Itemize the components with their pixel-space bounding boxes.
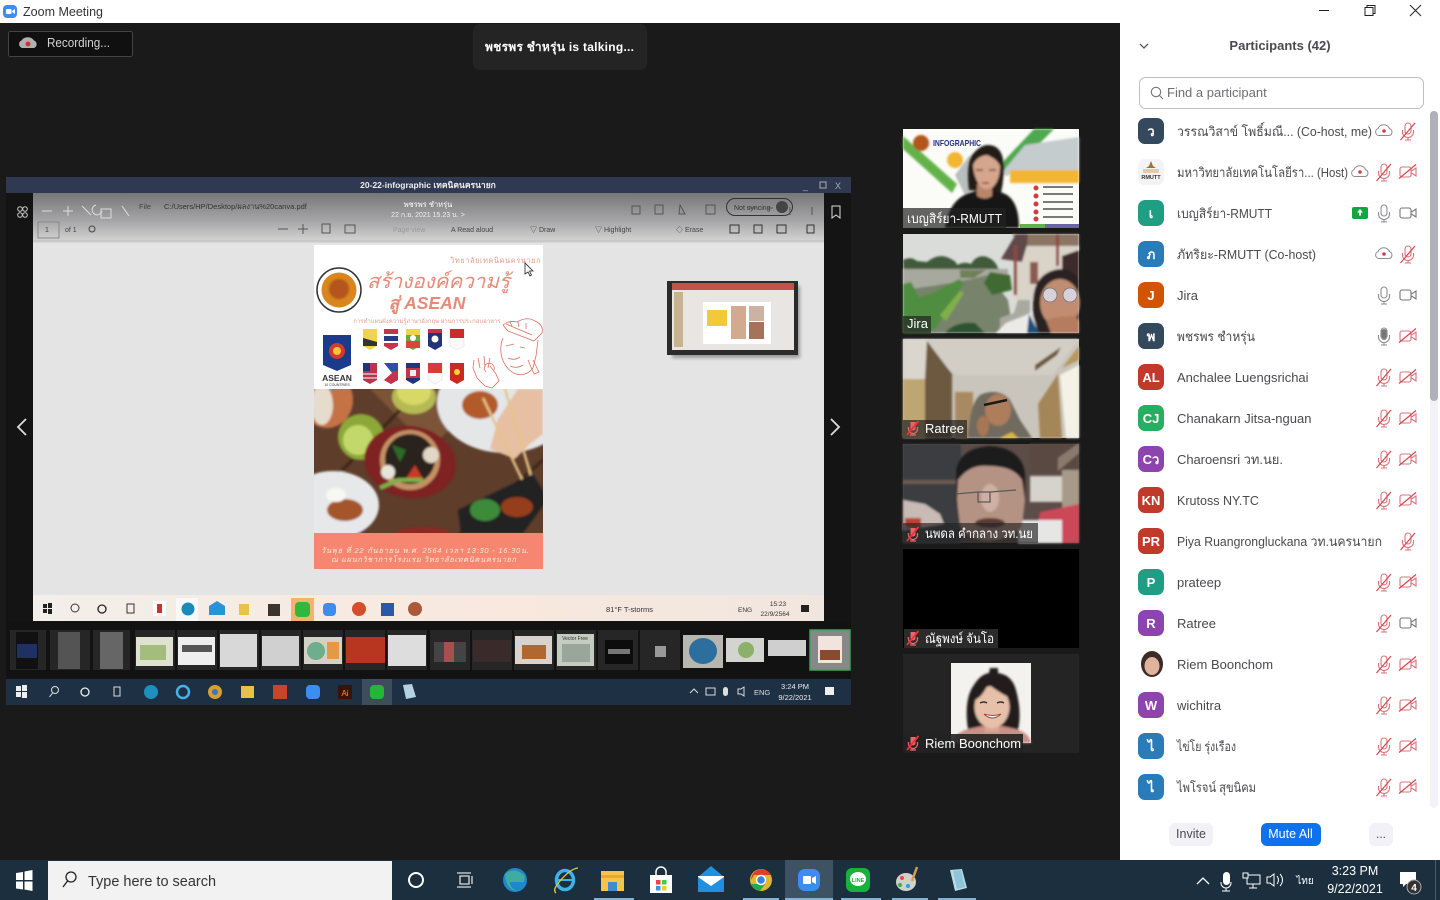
poster title: วิทยาลัยเทคนิคนครนายก	[449, 256, 541, 265]
participant: Riem Boonchom: Riem Boonchom	[1177, 657, 1273, 672]
shared screen window	[6, 177, 851, 705]
shared window title bar: 20-22-infographic เทคนิคนครนายก	[360, 180, 496, 190]
participant: ภัทริยะ-RMUTT: ภัทริยะ-RMUTT (Co-host)	[1177, 247, 1316, 262]
viewer toolbar: 22 ก.ย. 2021 15.23 น. >	[391, 212, 465, 219]
participant: Anchalee Luengsrichai	[1138, 364, 1416, 390]
icon: line	[841, 868, 881, 900]
icon: mail	[698, 866, 724, 892]
viewer toolbar: ▽ Draw	[530, 226, 556, 234]
cursor	[525, 263, 533, 276]
date banner	[314, 533, 543, 569]
ASEAN pennant	[322, 335, 352, 387]
date banner: วันพุธ ที่ 22 กันยายน พ.ศ. 2564 เวลา 13:30 - 16:30น.	[321, 545, 529, 555]
video tile: Jira: Jira	[907, 316, 929, 331]
system tray: ไทย	[1295, 875, 1314, 887]
participant: Anchalee Luengsrichai: Anchalee Luengsrichai	[1177, 370, 1309, 385]
mini taskbar	[33, 595, 824, 621]
viewer toolbar: C:/Users/HP/Desktop/ผลงาน%20canva.pdf	[164, 202, 308, 211]
talking indicator: พชรพร ชำหรุ่น is talking...	[485, 40, 634, 55]
participants heading: Participants (42)	[1229, 38, 1331, 53]
video tile: Ratree	[903, 339, 1079, 438]
poster title: สร้างองค์ความรู้	[367, 270, 514, 294]
participant: เบญสิร์ยา-RMUTT: เบญสิร์ยา-RMUTT	[1177, 206, 1272, 221]
participant: ไพโรจน์ สุขนิคม: ไ	[1146, 779, 1155, 795]
inset presenter preview	[667, 281, 800, 358]
participant: Ratree	[1138, 610, 1416, 636]
participant: Piya Ruangrongluckana	[1138, 528, 1415, 554]
icon: internet explorer	[555, 868, 578, 893]
presenter's taskbar: 3:24 PM	[781, 682, 809, 691]
video tile: Riem Boonchom	[903, 654, 1079, 753]
title bar	[0, 0, 1120, 23]
presenter's thumbnail strip	[6, 622, 851, 678]
participant: prateep	[1138, 569, 1416, 595]
participant: พชรพร ชำหรุ่น: พ	[1147, 329, 1155, 344]
participant: Piya Ruangrongluckana: PR	[1142, 534, 1161, 549]
icon: line: LINE	[852, 878, 865, 884]
search box	[1140, 78, 1424, 108]
date banner: ณ แผนกวิชาการโรงแรม วิทยาลัยเทคนิคนครนายก	[331, 555, 516, 564]
mini taskbar: 22/9/2564	[761, 611, 790, 618]
icon: file explorer	[594, 871, 634, 900]
clock: 3:23 PM	[1332, 864, 1378, 878]
video tile: นพดล คำกลาง วท.นย: นพดล คำกลาง วท.นย	[925, 526, 1033, 541]
participant: Host: มหาวิทยาลัยเทคโนโลยีรา... (Host)	[1177, 165, 1348, 180]
video tile: เบญสิร์ยา-RMUTT	[903, 129, 1079, 228]
collapse chevron	[1140, 44, 1148, 48]
participant: wichitra	[1138, 692, 1416, 718]
participant: Krutoss NY.TC	[1138, 487, 1416, 513]
participant: ไพโรจน์ สุขนิคม	[1138, 774, 1416, 800]
viewer toolbar	[18, 193, 840, 243]
poster title	[353, 256, 541, 325]
participant: Jira: Jira	[1177, 288, 1199, 303]
icon: cortana	[409, 873, 423, 887]
search box	[48, 861, 392, 900]
icon: start	[16, 870, 32, 891]
poster title: การทำแผนผังความรู้ภาษาอังกฤษ ผ่านการประกอบอาหาร	[353, 318, 502, 325]
college seal	[317, 268, 361, 312]
participant: Jira	[1138, 282, 1416, 308]
participant: พชรพร ชำหรุ่น	[1138, 323, 1416, 349]
notification badge: 4	[1411, 883, 1417, 894]
participant: ไข่โย รุ่งเรือง	[1138, 733, 1416, 759]
mute all button: Mute All	[1268, 827, 1313, 841]
participant: ภัทริยะ-RMUTT: ภ	[1147, 247, 1155, 262]
participant: Piya Ruangrongluckana: Piya Ruangrongluckana วท.นครนายก	[1177, 534, 1382, 549]
participant: ภัทริยะ-RMUTT	[1138, 241, 1415, 267]
participant: wichitra: wichitra	[1176, 698, 1222, 713]
viewer toolbar: 1	[45, 227, 49, 234]
participant: Chanakarn Jitsa-nguan: CJ	[1143, 411, 1159, 426]
video tile: เบญสิร์ยา-RMUTT: INFOGRAPHIC	[933, 138, 981, 148]
participant: wichitra: W	[1145, 698, 1158, 713]
presenter's taskbar: ENG	[754, 688, 770, 697]
chef drawing	[473, 319, 542, 388]
invite button	[1169, 823, 1213, 846]
participant: prateep: P	[1147, 575, 1156, 590]
mini taskbar: 81°F T-storms	[606, 605, 653, 614]
PDF viewer	[18, 193, 840, 621]
mini taskbar: ENG	[738, 607, 752, 614]
participant: เบญสิร์ยา-RMUTT	[1138, 200, 1416, 226]
video tile: Riem Boonchom: Riem Boonchom	[925, 736, 1021, 751]
video tile: เบญสิร์ยา-RMUTT: เบญสิร์ยา-RMUTT	[907, 211, 1002, 226]
viewer toolbar: พชรพร ชำหรุ่น	[404, 200, 452, 209]
presenter's taskbar: 9/22/2021	[778, 693, 812, 702]
participant: Anchalee Luengsrichai: AL	[1142, 370, 1160, 385]
participant: Charoensri	[1138, 446, 1416, 472]
icon: task view	[457, 873, 472, 887]
notification badge	[1400, 872, 1421, 894]
talking indicator	[473, 24, 647, 70]
clock	[1327, 864, 1383, 896]
mute all button	[1261, 823, 1321, 846]
ASEAN pennant: 10 COUNTRIES	[324, 383, 350, 387]
participant: Chanakarn Jitsa-nguan	[1138, 405, 1416, 431]
participant: ไข่โย รุ่งเรือง: ไ	[1146, 738, 1155, 754]
participant: Krutoss NY.TC: Krutoss NY.TC	[1177, 493, 1259, 508]
more button: ...	[1376, 827, 1386, 841]
icon: chrome	[743, 869, 779, 900]
window controls	[1319, 5, 1421, 16]
participant: Charoensri: Charoensri วท.นย.	[1177, 452, 1283, 467]
system tray	[1197, 872, 1314, 891]
flags of ASEAN countries	[363, 329, 464, 384]
search box: Type here to search	[88, 873, 216, 890]
participant: ไพโรจน์ สุขนิคม: ไพโรจน์ สุขนิคม	[1176, 780, 1256, 796]
shared window title bar	[6, 177, 851, 193]
presenter's taskbar: Ai	[341, 689, 349, 698]
participant: Ratree: R	[1146, 616, 1156, 631]
presenter's taskbar	[6, 679, 851, 705]
video tile: Jira	[903, 234, 1080, 333]
participant: prateep: prateep	[1177, 575, 1221, 590]
poster title: สู่ ASEAN	[389, 293, 466, 314]
Windows taskbar	[0, 860, 1440, 900]
participant: Krutoss NY.TC: KN	[1142, 493, 1160, 508]
icon: zoom logo	[3, 5, 17, 18]
shared window title bar: _	[802, 181, 809, 191]
recording indicator: Recording...	[47, 36, 110, 50]
participant: Jira: J	[1147, 288, 1155, 303]
icon: snipping tool	[938, 869, 976, 900]
food photo	[314, 389, 543, 533]
invite button: Invite	[1176, 827, 1206, 841]
video tile: ณัฐพงษ์ จันโอ: ณัฐพงษ์ จันโอ	[925, 631, 994, 647]
icon: store	[650, 867, 672, 893]
icon: edge	[503, 868, 527, 892]
recording indicator	[8, 32, 132, 56]
participant: ไข่โย รุ่งเรือง: ไข่โย รุ่งเรือง	[1176, 739, 1236, 755]
search box: Find a participant	[1167, 85, 1267, 100]
ASEAN pennant: ASEAN	[322, 373, 352, 383]
viewer toolbar: of 1	[65, 227, 77, 234]
poster	[314, 245, 543, 569]
app title: Zoom Meeting	[23, 5, 103, 19]
participant: Chanakarn Jitsa-nguan: Chanakarn Jitsa-nguan	[1177, 411, 1311, 426]
icon: zoom (active)	[785, 860, 833, 900]
icon: paint	[892, 867, 928, 900]
viewer toolbar: A Read aloud	[451, 227, 493, 234]
participant: Ratree: Ratree	[1177, 616, 1216, 631]
viewer toolbar: Page view	[393, 227, 426, 234]
participant: Riem Boonchom	[1141, 651, 1416, 677]
scrollbar	[1430, 111, 1438, 808]
viewer toolbar: ◇ Erase	[676, 226, 703, 234]
participants panel	[1120, 0, 1440, 860]
participant: วรรณวิสาข์	[1138, 118, 1415, 144]
viewer toolbar: ▽ Highlight	[595, 226, 631, 234]
mini taskbar: 15:23	[770, 601, 787, 608]
presenter's thumbnail strip: Vector Free	[562, 636, 588, 642]
video tile: Ratree: Ratree	[925, 421, 964, 436]
participant: Host	[1138, 159, 1416, 185]
video tile: นพดล คำกลาง วท.นย	[903, 443, 1079, 543]
participant: เบญสิร์ยา-RMUTT: เ	[1149, 206, 1153, 221]
more button	[1369, 823, 1393, 846]
participant: วรรณวิสาข์: วรรณวิสาข์ โพธิ์มณี... (Co-host, me)	[1177, 122, 1372, 139]
viewer toolbar: File	[139, 202, 151, 211]
participant: Host: RMUTT	[1141, 175, 1161, 181]
participant: Charoensri: Cว	[1143, 452, 1159, 467]
shared window title bar: X	[835, 181, 841, 191]
viewer toolbar: Not syncing	[734, 205, 771, 212]
previous and next arrows	[18, 419, 839, 435]
video tile: ณัฐพงษ์ จันโอ	[903, 549, 1079, 648]
participant: พชรพร ชำหรุ่น: พชรพร ชำหรุ่น	[1177, 329, 1255, 345]
participant: วรรณวิสาข์: ว	[1147, 124, 1155, 139]
clock: 9/22/2021	[1327, 882, 1383, 896]
